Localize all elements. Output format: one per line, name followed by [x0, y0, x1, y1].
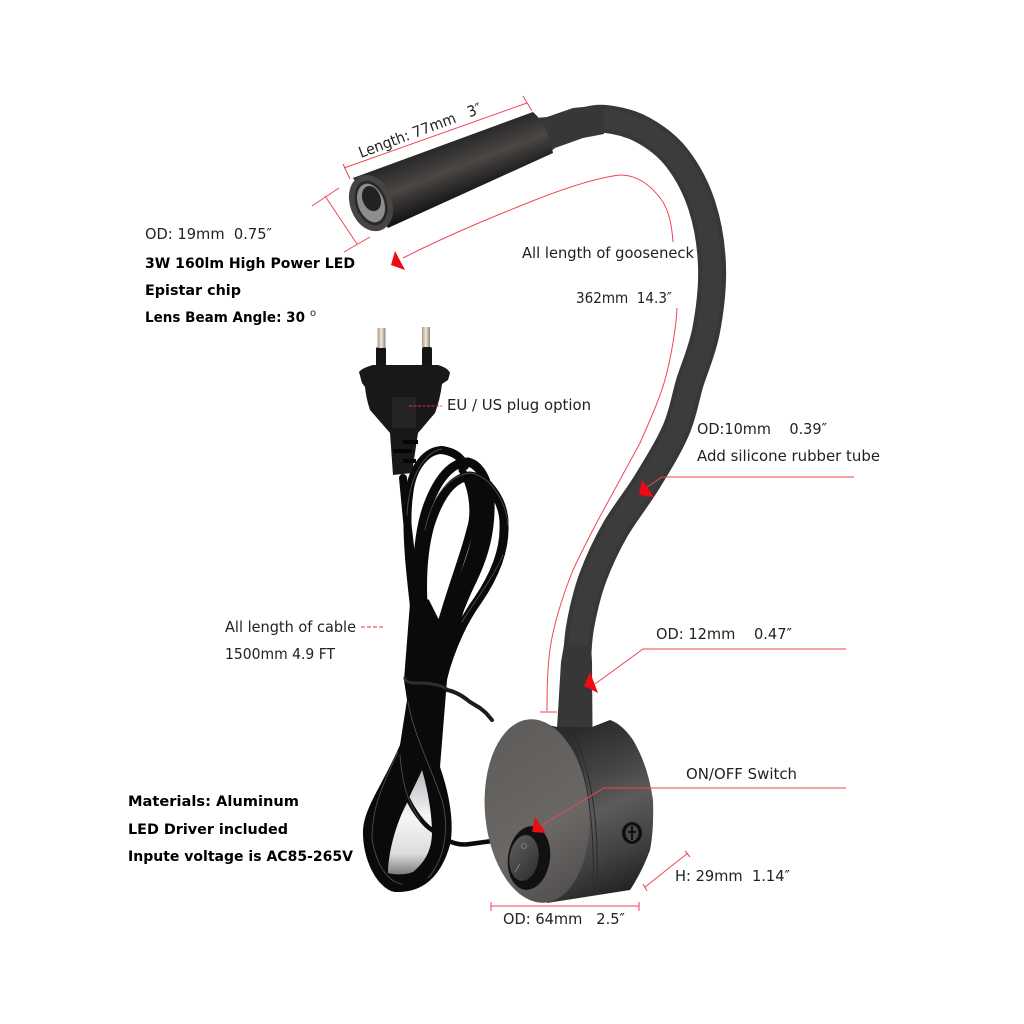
head specs text: 3W 160lm High Power LED: [145, 256, 355, 272]
power cable with plug: [359, 327, 508, 892]
gooseneck length arc and arrow: [391, 175, 677, 712]
gooseneck length label: 362mm 14.3″: [576, 289, 672, 307]
silicone tube callout: Add silicone rubber tube: [697, 447, 880, 465]
cable length label: [225, 618, 383, 663]
lower tube callout: OD: 12mm 0.47″: [656, 625, 792, 643]
head specs text: [145, 225, 355, 326]
head specs text: Epistar chip: [145, 283, 241, 299]
lens face: [341, 169, 401, 237]
base height dimension: [643, 851, 790, 891]
lamp head cylinder: [341, 112, 553, 237]
gooseneck length label: All length of gooseneck: [522, 244, 694, 262]
silicone tube callout: OD:10mm 0.39″: [697, 420, 827, 438]
base height dimension: H: 29mm 1.14″: [675, 867, 790, 885]
head diameter dimension: [312, 188, 370, 252]
head specs text: o: [310, 308, 316, 319]
head length label: Length: 77mm 3″: [356, 99, 485, 162]
cable length label: 1500mm 4.9 FT: [225, 645, 336, 663]
plug pins: [376, 327, 432, 367]
cable upper loops: [403, 449, 508, 680]
base diameter dimension: [491, 902, 639, 928]
rocker switch: [504, 823, 554, 893]
cable length label: All length of cable: [225, 618, 356, 636]
thicker sleeve at head: [535, 105, 604, 156]
screw: [622, 822, 642, 844]
materials text: Inpute voltage is AC85-265V: [128, 849, 354, 865]
head length dimension: [343, 96, 532, 179]
materials text: Materials: Aluminum: [128, 794, 299, 810]
thicker sleeve at base: [557, 645, 592, 728]
materials text: [128, 794, 354, 865]
lamp gooseneck tube: [535, 105, 712, 728]
inner band of strands: [441, 478, 493, 630]
head specs text: OD: 19mm 0.75″: [145, 225, 272, 243]
gap inside lower loop: [388, 770, 432, 874]
cable lower strands: [372, 702, 492, 884]
base diameter dimension: OD: 64mm 2.5″: [503, 910, 625, 928]
head specs text: Lens Beam Angle: 30: [145, 310, 305, 326]
silicone tube callout: [639, 420, 880, 497]
cable bundle and lower loop body: [363, 590, 465, 892]
wall base body: [477, 715, 653, 907]
plug body: [359, 365, 450, 475]
materials text: LED Driver included: [128, 822, 288, 838]
base front face: [477, 715, 597, 907]
upper loop highlights: [407, 449, 442, 515]
switch callout: [532, 765, 846, 833]
gooseneck length label: [522, 244, 694, 307]
tie wrap: [405, 677, 492, 720]
lower tube callout: [584, 625, 846, 693]
plug label: EU / US plug option: [447, 396, 591, 414]
switch callout: ON/OFF Switch: [686, 765, 797, 783]
